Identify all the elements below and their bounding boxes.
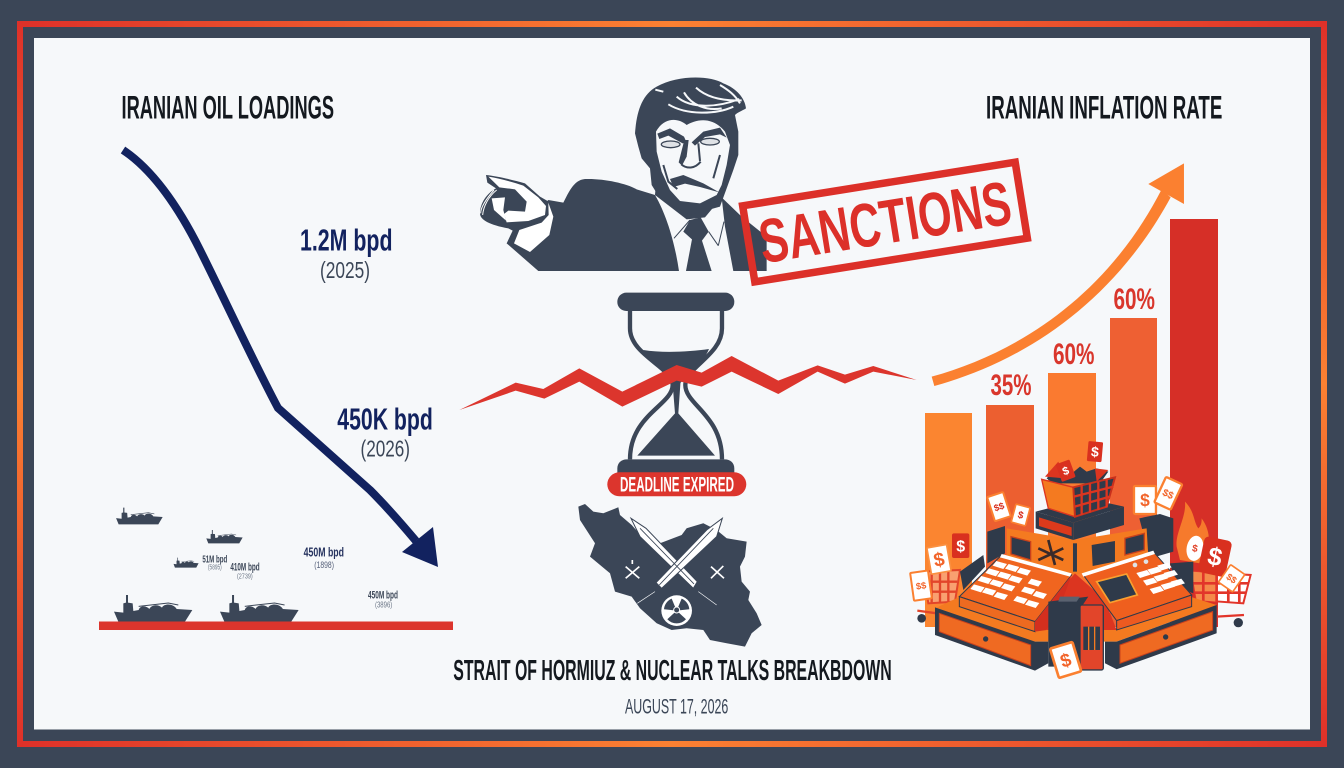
red baseline [99, 622, 453, 630]
stat: 450K bpd 2026 [337, 401, 433, 462]
price tags: $ [932, 549, 947, 572]
bar chart: 60% [1053, 338, 1094, 371]
map: Iran with crossed swords [578, 504, 762, 647]
price tags: $ [1140, 490, 1150, 510]
ships and minor labels: 410M bpd [230, 562, 260, 574]
ships and minor labels: 450M bpd [368, 590, 398, 602]
ships and minor labels: (1898) [314, 560, 334, 570]
price tags: $ [956, 538, 965, 555]
side boxes [960, 514, 1193, 593]
left keypad [959, 554, 1072, 632]
ships and minor labels: (5895) [208, 562, 222, 571]
flame [1176, 502, 1209, 563]
center column and phone [1048, 597, 1103, 670]
illustration: cash registers, carts and price tags [910, 441, 1251, 678]
bar chart: 60% [1114, 283, 1155, 316]
price tags [910, 441, 1245, 678]
price tags: $$ [993, 500, 1006, 513]
stat: 1.2M bpd 2025: 1.2M bpd [300, 223, 392, 258]
price tags: $$ [1160, 487, 1175, 502]
ships and minor labels [114, 508, 398, 622]
title: strait of hormuz: STRAIT OF HORMIUZ & NUCLEAR TALKS BREAKBDOWN [453, 655, 892, 687]
panel: inflation [910, 89, 1251, 678]
suit and hand [480, 175, 767, 271]
ships and minor labels: 450M bpd [304, 544, 344, 559]
ships and minor labels: 51M bpd [202, 554, 227, 565]
ships and minor labels: (3896) [375, 600, 393, 609]
ships and minor labels: (2739) [237, 571, 253, 580]
panel: oil loadings [99, 89, 453, 630]
stamp: sanctions: SANCTIONS [754, 169, 1016, 277]
stat: 450K bpd 2026: (2026) [360, 436, 410, 462]
badge: deadline expired [607, 472, 746, 497]
arrow: falling oil loadings [123, 150, 438, 567]
left cart [917, 570, 960, 623]
drawer platforms [935, 597, 1217, 671]
right cart [1192, 572, 1251, 627]
price tags: $ [1016, 510, 1025, 522]
center wedge [1047, 573, 1117, 630]
price tags: $ [1191, 543, 1199, 555]
illustration: pointing figure [480, 77, 767, 271]
stat: 450K bpd 2026: 450K bpd [337, 401, 433, 436]
chart line: jagged red line [459, 356, 917, 410]
date: AUGUST 17, 2026 [625, 694, 728, 718]
stamp: sanctions [743, 162, 1027, 282]
register body [1007, 528, 1148, 575]
heading: Iranian oil loadings: IRANIAN OIL LOADINGS [122, 89, 334, 125]
icon: hourglass [617, 293, 734, 477]
stat: 1.2M bpd 2025 [300, 223, 392, 283]
stat: 1.2M bpd 2025: (2025) [320, 257, 370, 283]
right keypad [1082, 551, 1192, 630]
head [635, 77, 746, 215]
price tags: $ [1061, 465, 1072, 478]
price tags: $ [1058, 648, 1074, 672]
price tags: $$ [915, 580, 928, 592]
price tags: $ [1205, 542, 1225, 572]
badge: deadline expired: DEADLINE EXPIRED [620, 474, 734, 497]
arrow: rising inflation [932, 163, 1184, 386]
price tags: $ [1090, 443, 1100, 460]
bar chart [925, 219, 1218, 627]
bar chart: 35% [990, 369, 1032, 402]
top stand [1036, 498, 1124, 540]
basket [1042, 462, 1115, 517]
price tags: $$ [1224, 572, 1239, 586]
